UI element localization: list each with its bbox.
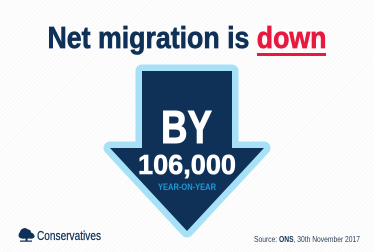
- icon: oak tree: [19, 228, 35, 242]
- source note: Source: ONS, 30th November 2017: [254, 235, 360, 244]
- arrow outline: [110, 71, 264, 231]
- BY text: BY: [161, 101, 212, 153]
- title: Net migration is down: [48, 21, 326, 55]
- 106,000 text: 106,000: [138, 149, 236, 180]
- arrow graphic: [110, 71, 264, 231]
- year-on-year text: YEAR-ON-YEAR: [158, 182, 216, 193]
- logo: Conservatives: [19, 228, 101, 243]
- arrow body: [110, 71, 264, 231]
- wordmark: Conservatives: [37, 229, 101, 243]
- title underline: [257, 53, 326, 56]
